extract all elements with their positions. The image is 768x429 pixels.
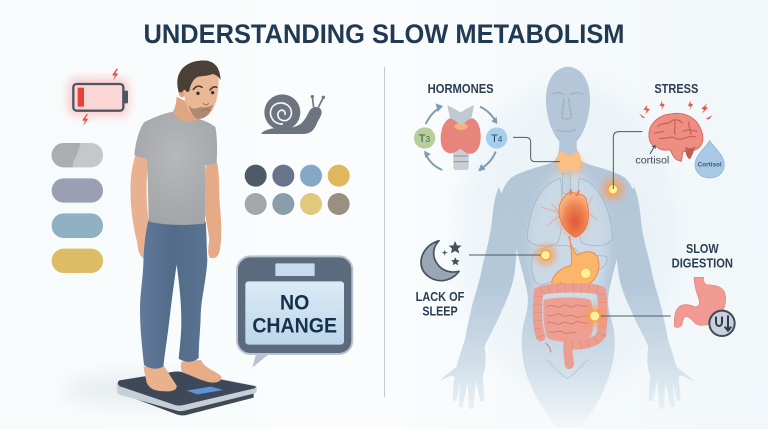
lack of sleep label: LACK OF (416, 290, 465, 304)
marker: liver (534, 244, 557, 266)
icon: thyroid with T3 and T4 cycle: T4 (491, 133, 503, 145)
palette dots (245, 165, 350, 215)
figure: man on scale (63, 60, 257, 415)
callout line: sleep (469, 253, 541, 256)
stress label: STRESS (654, 82, 698, 96)
icon: thyroid with T3 and T4 cycle: T3 (419, 133, 431, 145)
hormones label: HORMONES (428, 82, 494, 96)
icon: stressed brain with cortisol: Cortisol (698, 161, 722, 168)
callout line: digestion (601, 314, 671, 317)
body silhouette (440, 67, 693, 428)
groin crease (547, 360, 587, 378)
pills: colour swatches (52, 143, 103, 273)
slow digestion label: SLOW (686, 242, 719, 256)
hands (440, 339, 486, 409)
panel: causes of slow metabolism (414, 67, 735, 428)
face shading (552, 93, 583, 131)
icon: moon and stars (421, 241, 462, 281)
icon: stressed brain with cortisol: cortisol (635, 156, 669, 167)
callout line: thyroid (513, 137, 560, 162)
callout text: CHANGE (252, 315, 337, 338)
icon: snail (261, 94, 325, 134)
human body illustration (440, 67, 693, 428)
marker: stomach (580, 268, 591, 279)
stomach (552, 237, 599, 291)
icon: stressed brain with cortisol (635, 100, 724, 178)
chest highlight (531, 170, 607, 330)
callout line: stress (613, 132, 642, 189)
slow digestion label: DIGESTION (672, 257, 733, 271)
heart (557, 190, 590, 237)
marker: intestine (583, 305, 606, 327)
intestines (537, 288, 603, 364)
callout: no change scale readout (237, 256, 352, 368)
title: UNDERSTANDING SLOW METABOLISM (144, 19, 624, 49)
lack of sleep label: SLEEP (422, 304, 458, 318)
lungs and liver (527, 173, 612, 285)
panel: person and symptoms (52, 60, 352, 415)
icon: stomach with slow arrows (674, 277, 735, 336)
callout text: NO (280, 291, 309, 314)
bathroom scale (117, 371, 257, 415)
thyroid (554, 151, 585, 176)
icon: thyroid with T3 and T4 cycle (414, 103, 507, 171)
marker: shoulder (601, 177, 625, 201)
icon: low battery (68, 69, 128, 126)
